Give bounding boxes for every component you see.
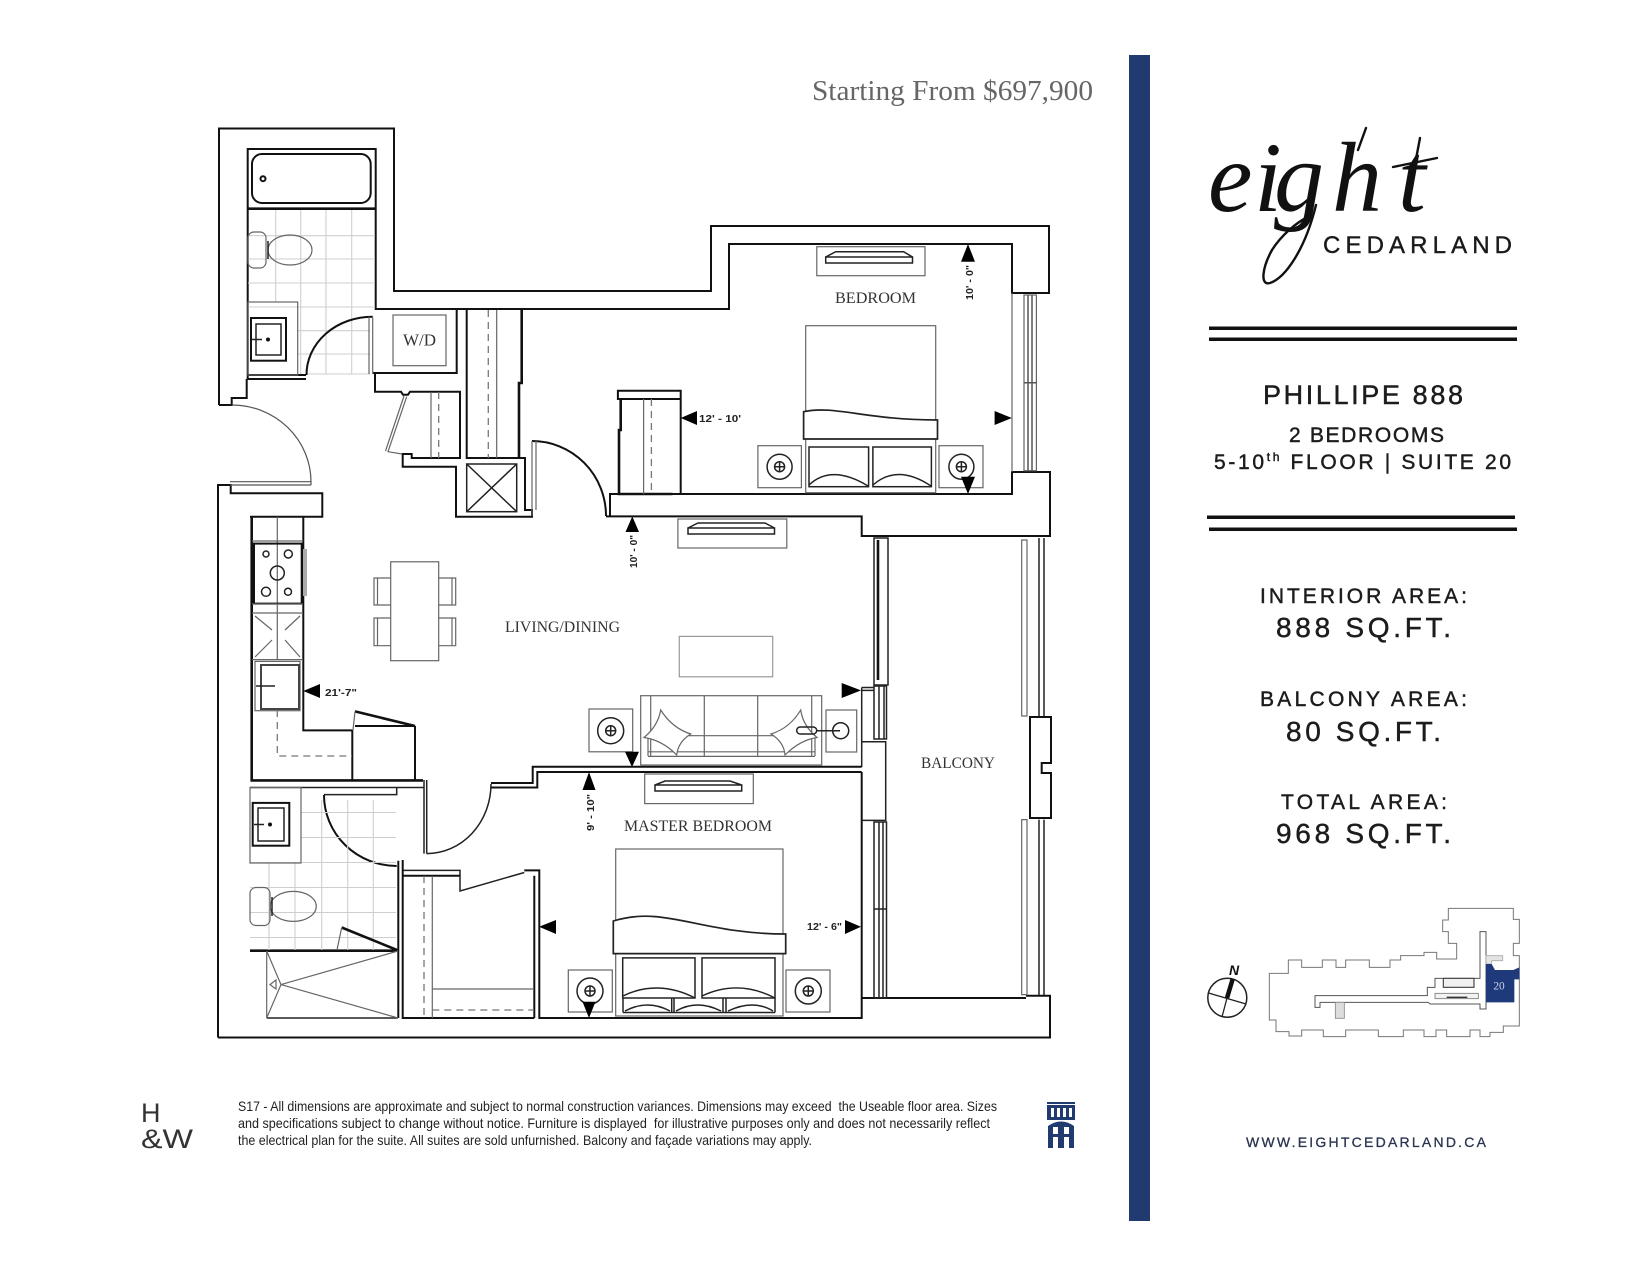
navy vertical divider bar [1129, 55, 1150, 1221]
footer: disclaimer: the electrical plan for the suite. All suites are sold unfurnished. Balcony and façade variations may apply. [238, 1132, 812, 1148]
master nightstands [568, 970, 830, 1012]
area figures: INTERIOR AREA: [1260, 585, 1467, 608]
suite 20 highlight [1486, 964, 1519, 1002]
double rule bottom [1207, 516, 1517, 531]
ensuite vanity [250, 788, 301, 863]
dimension arrows and labels [303, 244, 1012, 1018]
master bath room [248, 154, 376, 375]
suite details: 2 BEDROOMS [1289, 424, 1444, 447]
compass: N [1229, 962, 1240, 978]
dimension arrows and labels: 10' - 0" [628, 535, 640, 568]
toilet [248, 232, 312, 268]
ensuite bathroom [250, 788, 534, 1018]
media unit [678, 519, 787, 548]
shower [267, 928, 398, 1018]
compass [1208, 962, 1247, 1017]
vanity and sink [248, 302, 298, 375]
fridge box [252, 604, 303, 660]
website: WWW.EIGHTCEDARLAND.CA [1246, 1134, 1487, 1150]
area figures: 968 SQ.FT. [1276, 818, 1451, 849]
area figures: TOTAL AREA: [1281, 791, 1447, 814]
footer: H&W logo: H [141, 1098, 160, 1128]
suite details: PHILLIPE 888 [1263, 380, 1463, 410]
washer dryer closet [393, 315, 446, 366]
doors [230, 405, 606, 866]
suite 20 highlight: 20 [1493, 980, 1505, 992]
ensuite tiles [250, 800, 396, 950]
suite details: th [1267, 450, 1279, 464]
kitchen [252, 517, 415, 756]
room label: BEDROOM [835, 290, 916, 307]
footer: disclaimer: S17 - All dimensions are approximate and subject to normal construction variances. Dimensions may exceed the Useable floor area. Sizes [238, 1098, 997, 1114]
logo: eight Cedarland: CEDARLAND [1323, 232, 1512, 259]
logo: eight Cedarland: eight [1208, 122, 1428, 233]
balcony label: BALCONY [921, 755, 995, 772]
master dresser [645, 774, 753, 804]
sofa [641, 696, 822, 765]
suite details: FLOOR | SUITE 20 [1282, 451, 1511, 474]
floor plan [218, 128, 1051, 1038]
dining table and chairs [374, 562, 456, 661]
walls [218, 128, 1050, 1038]
suite details [1214, 380, 1511, 474]
bathtub [252, 154, 371, 203]
washer dryer closet: W/D [403, 330, 436, 350]
dresser [817, 247, 925, 276]
closets and shaft [386, 310, 651, 512]
living nightstands [589, 709, 857, 752]
key plan [1269, 908, 1519, 1037]
kitchen sink [255, 661, 300, 711]
ensuite toilet [250, 888, 316, 926]
area figures: 888 SQ.FT. [1276, 612, 1451, 643]
double rule top [1209, 326, 1517, 341]
master bedroom furniture [568, 774, 830, 1016]
room label: MASTER BEDROOM [624, 818, 772, 835]
rug [679, 636, 773, 677]
stove [254, 544, 307, 604]
dimension arrows and labels: 12' - 10' [699, 413, 741, 425]
bathroom tiles [248, 210, 375, 374]
master bed [613, 849, 786, 1016]
area figures [1260, 585, 1467, 849]
living room furniture [374, 519, 995, 772]
bed [804, 326, 938, 493]
suite details: 5-10 [1214, 451, 1264, 474]
footer: building icon [1047, 1102, 1075, 1148]
bath door [306, 317, 373, 375]
nightstands [758, 446, 983, 488]
logo: eight Cedarland [1208, 122, 1512, 283]
area figures: 80 SQ.FT. [1286, 716, 1441, 747]
walk-in closet [432, 876, 534, 1018]
footer: H&W logo: &W [141, 1124, 194, 1154]
footer: disclaimer [238, 1098, 997, 1148]
price heading: Starting From $697,900 [812, 76, 1093, 107]
dimension arrows and labels: 9' - 10" [585, 794, 597, 831]
balcony and windows [874, 293, 1051, 998]
dimension arrows and labels: 21'-7" [325, 687, 357, 699]
area figures: BALCONY AREA: [1260, 688, 1467, 711]
dimension arrows and labels: 10' - 0" [964, 265, 976, 300]
bedroom furniture [758, 247, 983, 493]
dimension arrows and labels: 12' - 6" [807, 921, 842, 933]
footer: disclaimer: and specifications subject to change without notice. Furniture is displayed for illustrative purposes only and does not necessarily reflect [238, 1115, 990, 1131]
room label: LIVING/DINING [505, 619, 620, 636]
footer: H&W logo [141, 1098, 194, 1154]
